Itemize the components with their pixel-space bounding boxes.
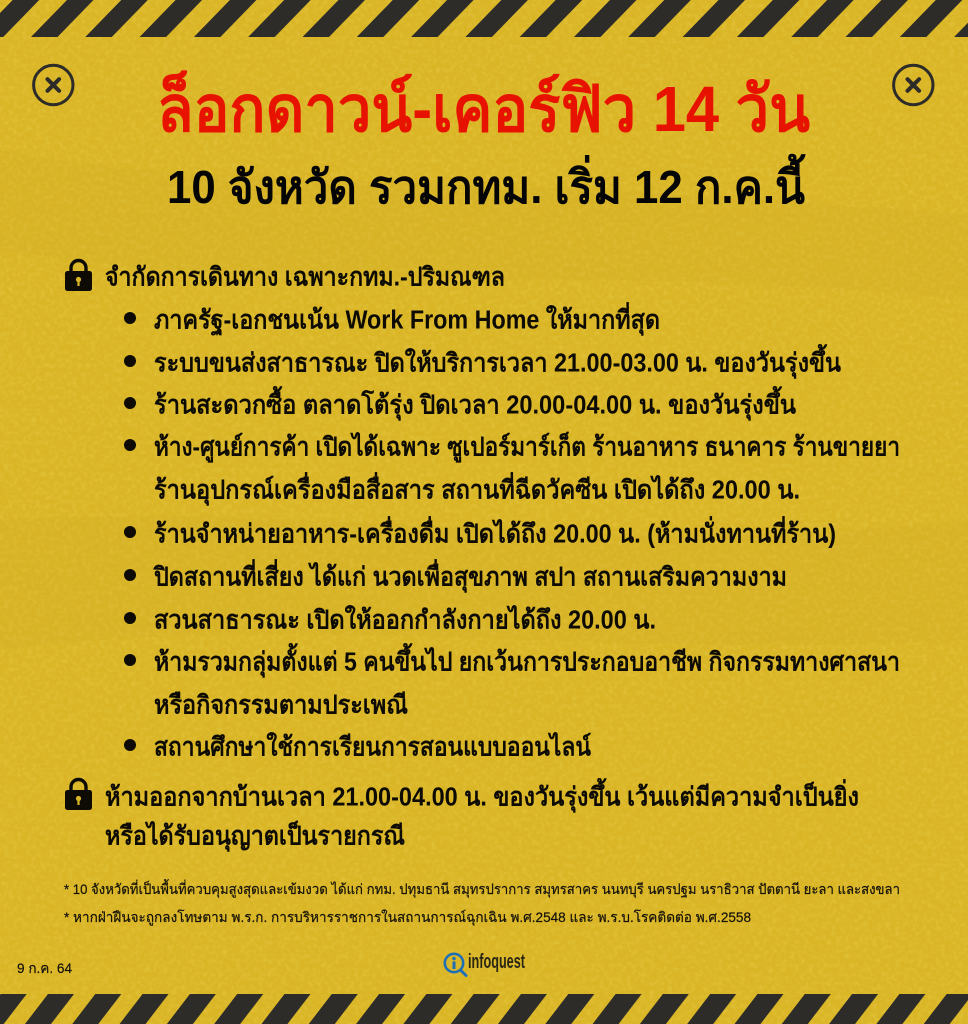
heading: night curfew [105,778,859,852]
subtitle: 10 จังหวัด รวมกทม. เริ่ม 12 ก.ค.นี้ [167,153,806,213]
bullet 4 [124,432,900,506]
bullet 8 [124,642,900,720]
bullet 8: ห้ามรวมกลุ่มตั้งแต่ 5 คนขึ้นไป ยกเว้นการประกอบอาชีพ กิจกรรมทางศาสนา [154,642,900,678]
icon: left close circle [34,65,73,105]
heading: travel restriction: จำกัดการเดินทาง เฉพาะกทม.-ปริมณฑล [105,264,505,292]
title: ล็อกดาวน์-เคอร์ฟิว 14 วัน [157,71,810,145]
bullet 9: สถานศึกษาใช้การเรียนการสอนแบบออนไลน์ [154,732,592,762]
logo: infoquest: infoquest [468,951,525,973]
footnotes: * 10 จังหวัดที่เป็นพื้นที่ควบคุมสูงสุดและเข้มงวด ได้แก่ กทม. ปทุมธานี สมุทรปราการ สมุทรสาคร นนทบุรี นครปฐม นราธิวาส ปัตตานี ยะลา และสงขลา [64,879,900,898]
footnotes [64,879,900,926]
bullet 7: สวนสาธารณะ เปิดให้ออกกำลังกายได้ถึง 20.00 น. [154,604,656,634]
icon: padlock 2 [65,780,92,810]
footnotes: * หากฝ่าฝืนจะถูกลงโทษตาม พ.ร.ก. การบริหารราชการในสถานการณ์ฉุกเฉิน พ.ศ.2548 และ พ.ร.บ.โรคติดต่อ พ.ศ.2558 [64,909,751,926]
bullet 3: ร้านสะดวกซื้อ ตลาดโต้รุ่ง ปิดเวลา 20.00-04.00 น. ของวันรุ่งขึ้น [154,386,797,422]
logo: infoquest [445,951,525,976]
bullet 4: ร้านอุปกรณ์เครื่องมือสื่อสาร สถานที่ฉีดวัคซีน เปิดได้ถึง 20.00 น. [154,472,800,506]
bottom hazard stripes [0,994,968,1024]
bullet 8: หรือกิจกรรมตามประเพณี [154,690,408,720]
bullet 2 [124,344,842,380]
bullet 1: ภาครัฐ-เอกชนเน้น Work From Home ให้มากที่สุด [154,302,660,338]
icon: right close circle [894,65,933,105]
heading: night curfew: หรือได้รับอนุญาตเป็นรายกรณี [105,820,405,852]
bullet 6: ปิดสถานที่เสี่ยง ได้แก่ นวดเพื่อสุขภาพ สปา สถานเสริมความงาม [153,558,787,594]
bullet 1 [124,302,660,338]
top hazard stripes [0,0,968,37]
restriction list [124,302,900,762]
heading: night curfew: ห้ามออกจากบ้านเวลา 21.00-04.00 น. ของวันรุ่งขึ้น เว้นแต่มีความจำเป็นยิ่ง [105,778,859,814]
bullet 5: ร้านจำหน่ายอาหาร-เครื่องดื่ม เปิดได้ถึง 20.00 น. (ห้ามนั่งทานที่ร้าน) [154,516,836,548]
bullet 2: ระบบขนส่งสาธารณะ ปิดให้บริการเวลา 21.00-03.00 น. ของวันรุ่งขึ้น [154,344,842,380]
date: 9 ก.ค. 64 [17,960,72,976]
icon: padlock 1 [65,260,92,291]
